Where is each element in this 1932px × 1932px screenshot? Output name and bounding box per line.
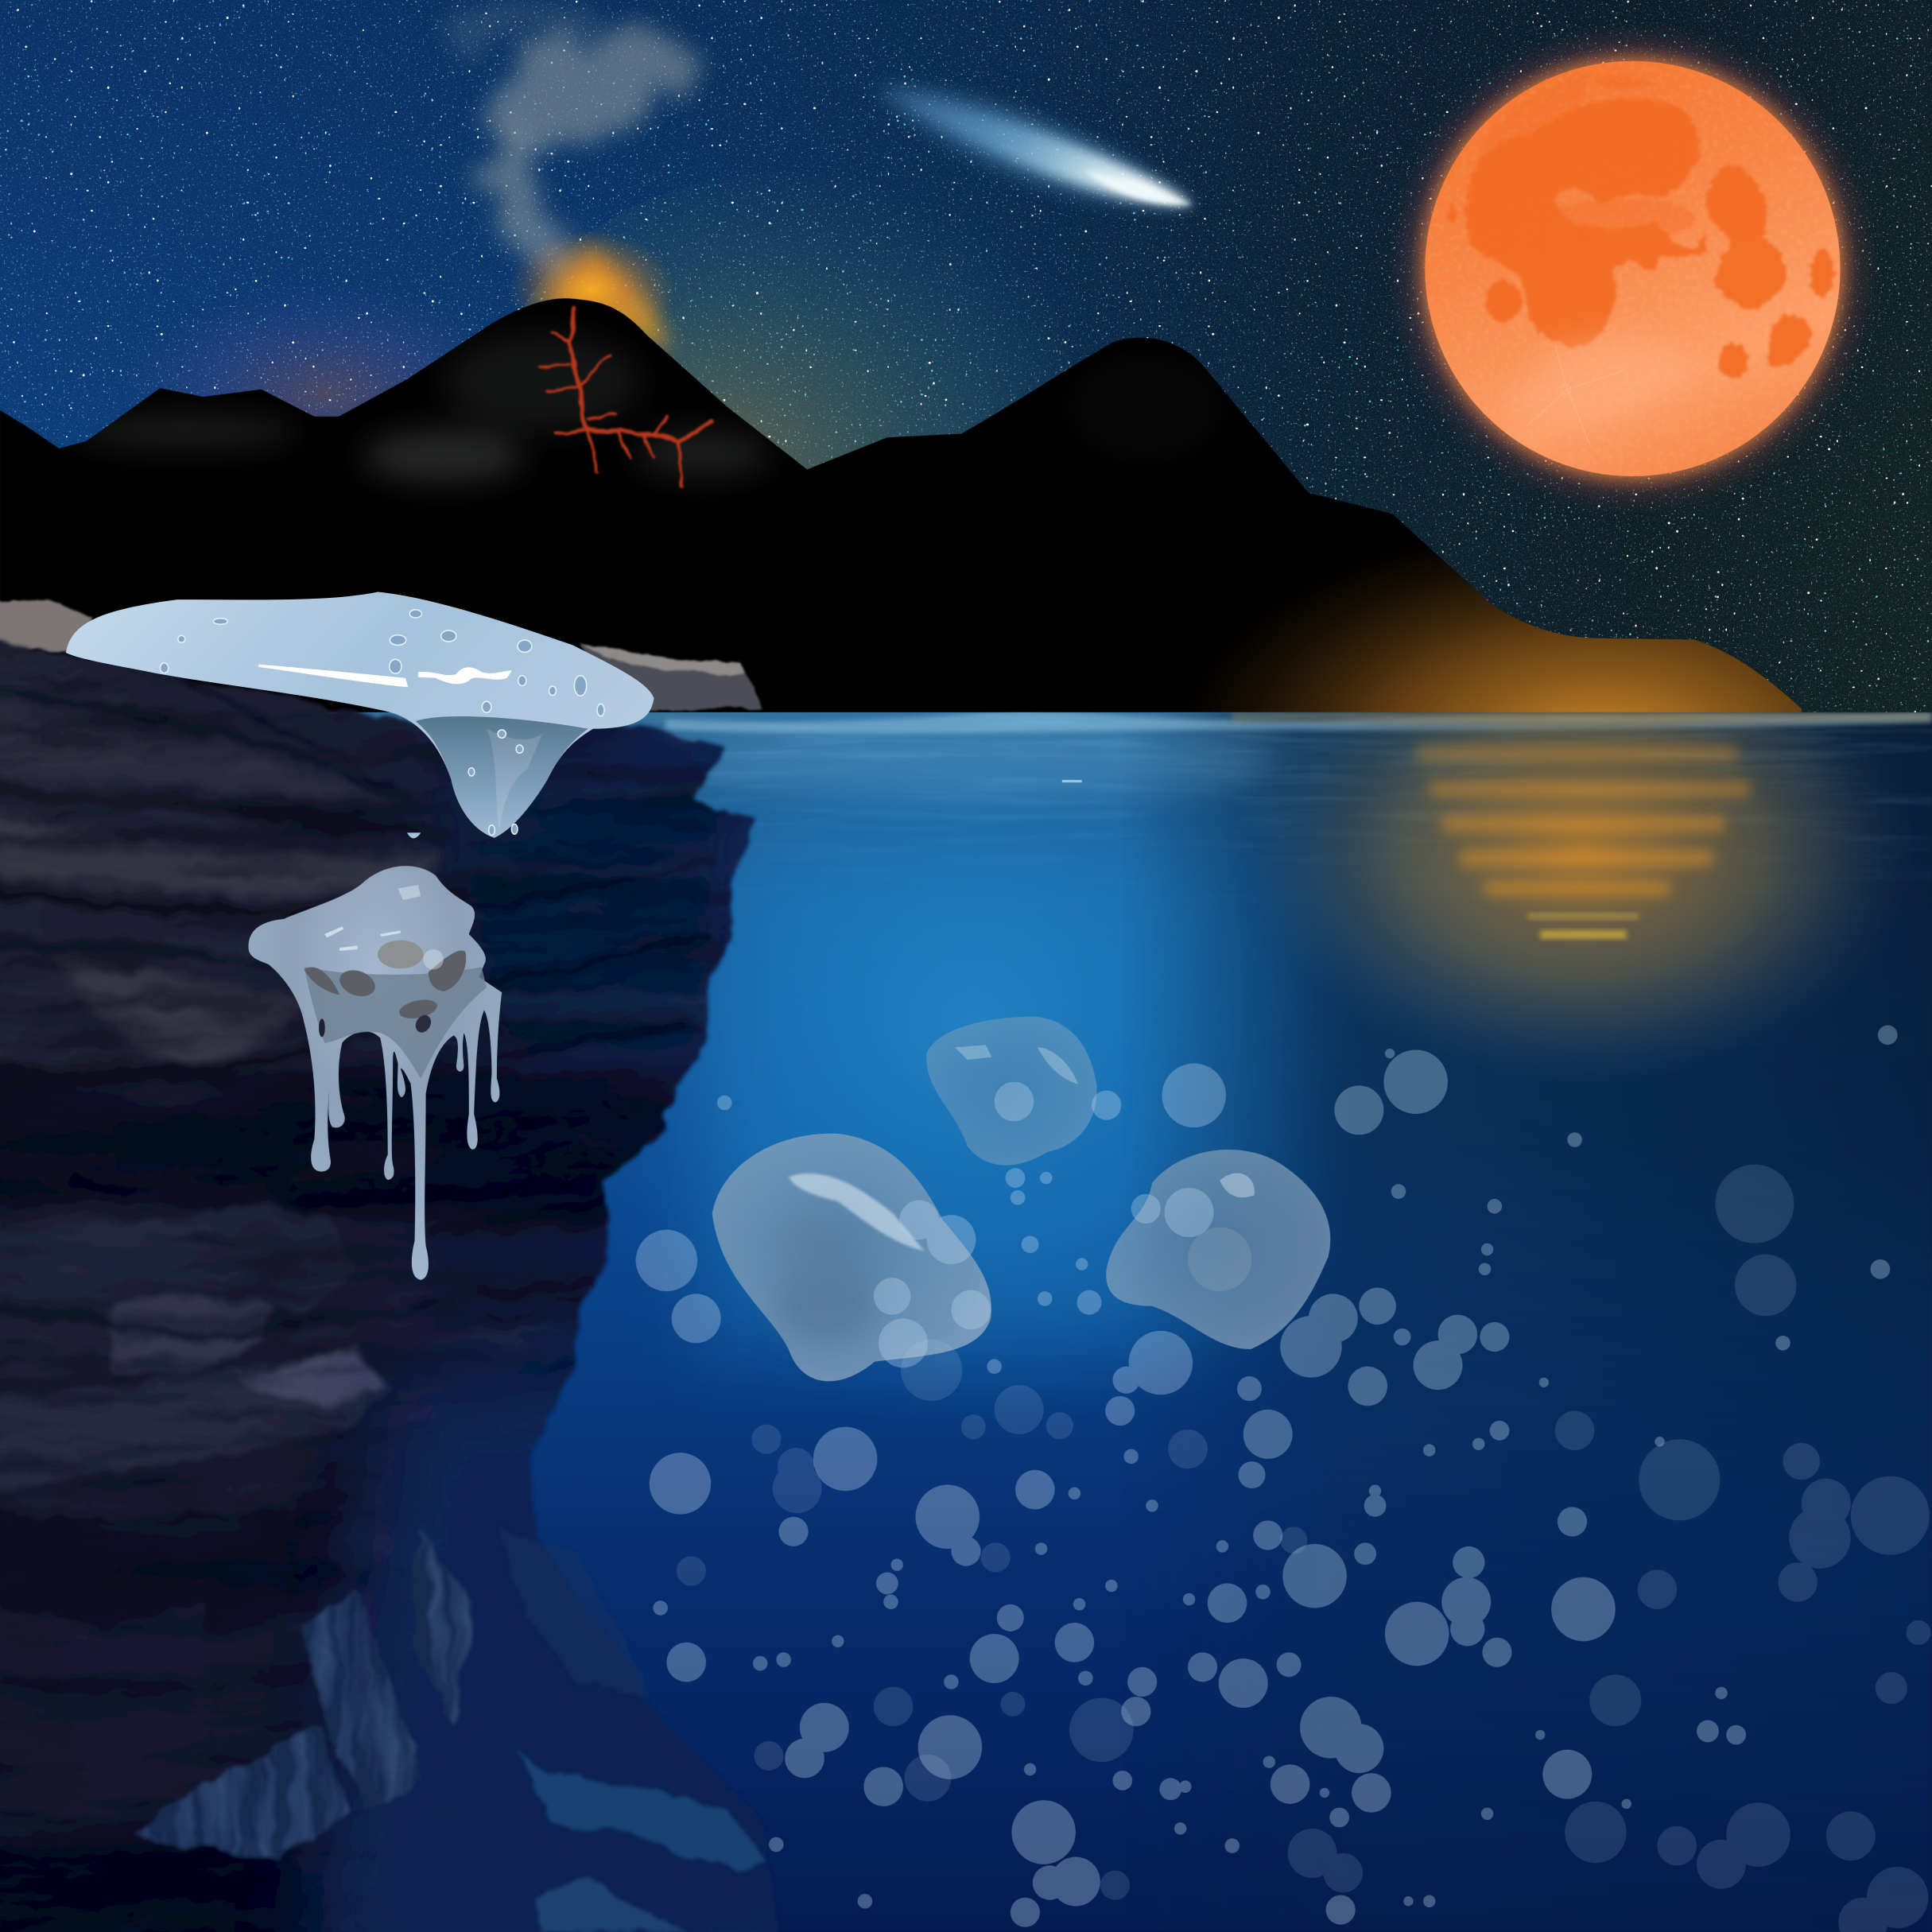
golden glow on the far shore xyxy=(1170,518,1932,986)
water droplets on ice xyxy=(160,610,604,836)
rocky cliff distant ledge xyxy=(0,599,764,712)
lower web shadow xyxy=(305,967,487,1079)
underwater rock outcrops xyxy=(499,1528,770,1932)
smoke plume from the volcano xyxy=(475,19,699,258)
bubbles: bright xyxy=(636,1049,1616,1927)
floating translucent ice blob: left xyxy=(712,1134,991,1381)
lava crack on volcano flank xyxy=(540,308,712,486)
ocean water body xyxy=(0,616,1932,1932)
top ice slab melting over the cliff xyxy=(66,592,654,838)
small falling drop xyxy=(407,832,421,838)
bright highlands on the southern limb xyxy=(1503,336,1688,423)
black mountain range with volcano xyxy=(0,298,1802,717)
dark rock recesses xyxy=(0,776,727,1932)
glints xyxy=(324,885,444,969)
strata crack lines xyxy=(0,665,715,1336)
background: starry night sky xyxy=(0,0,1932,715)
bubbles: small specks xyxy=(653,1025,1898,1909)
blood-orange full moon xyxy=(1386,22,1879,515)
lower ice blob dripping from rock xyxy=(248,866,502,1280)
cliff face with strata xyxy=(0,616,838,1932)
mountain haze xyxy=(74,332,1220,483)
surface ripples xyxy=(641,712,1932,921)
blue depth fade over lower cliff xyxy=(308,1331,838,1932)
floating translucent ice blob: right xyxy=(1106,1150,1330,1349)
crater rays xyxy=(1528,345,1627,444)
submerged vertical rock striations xyxy=(123,1515,493,1873)
floating translucent ice blob: top xyxy=(926,1017,1097,1166)
translucent drip xyxy=(416,716,588,838)
lunar maria xyxy=(1447,73,1833,378)
holes showing rock xyxy=(305,941,466,1037)
rock blocks xyxy=(0,1201,390,1849)
bubbles: dim xyxy=(677,1165,1930,1932)
volcano eruption glow xyxy=(507,231,675,351)
comet xyxy=(877,89,1193,205)
lit rock bands xyxy=(0,702,444,1065)
orange moon reflection xyxy=(1251,616,1916,1084)
specular highlights xyxy=(258,665,542,830)
